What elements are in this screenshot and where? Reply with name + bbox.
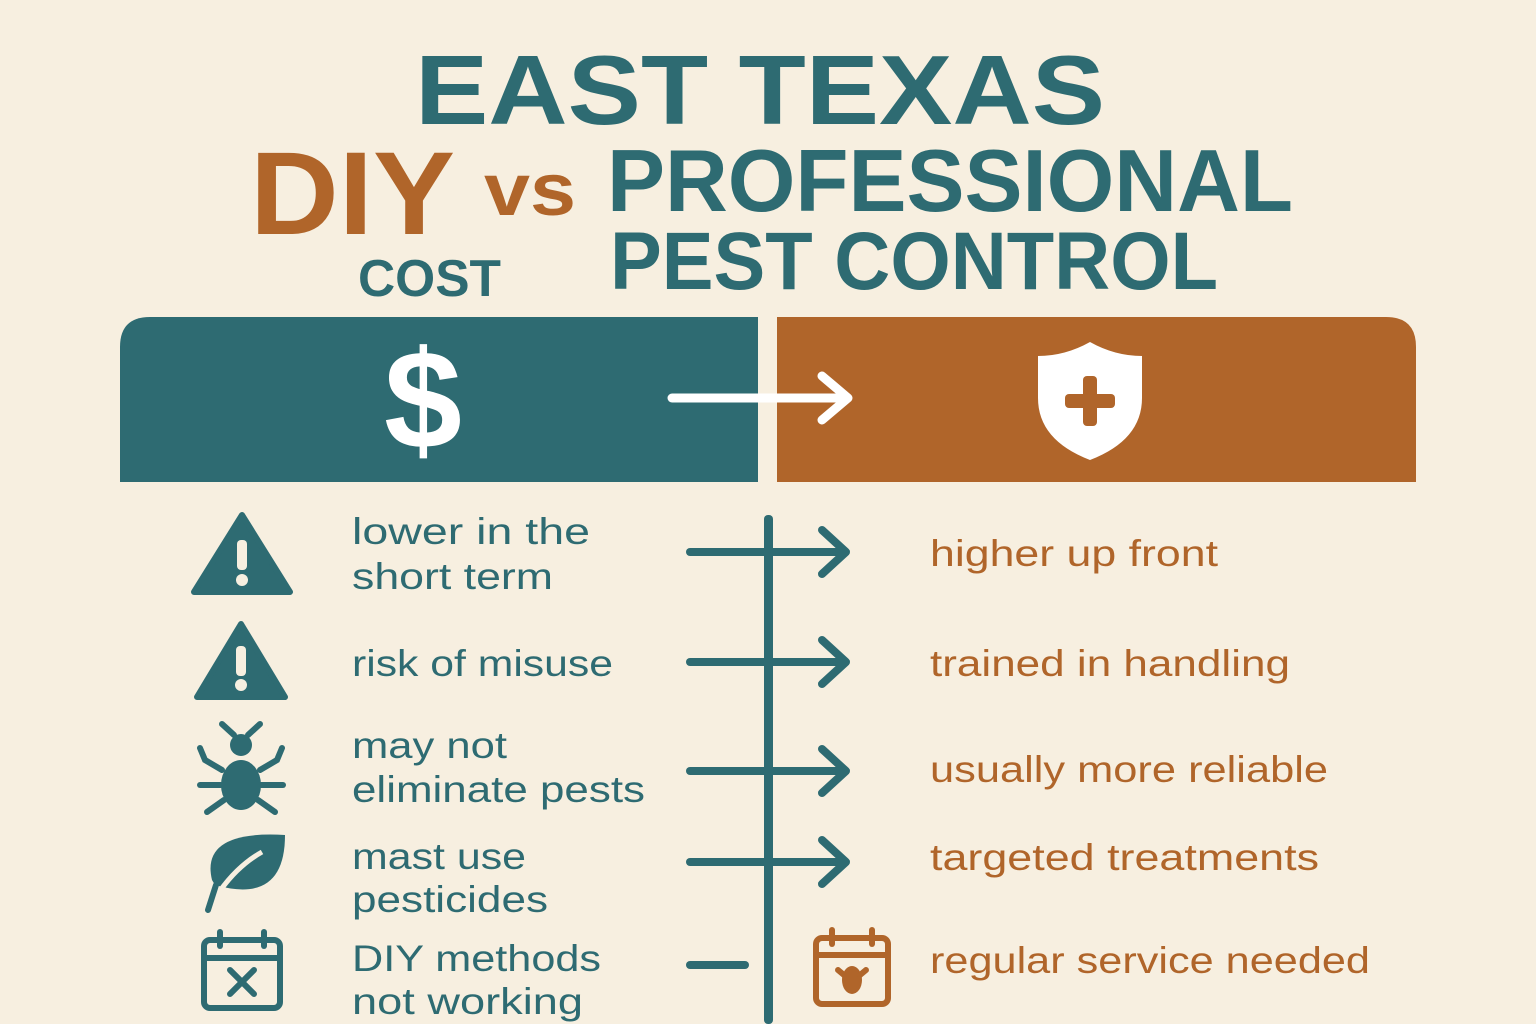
icon: calendar bug (816, 930, 888, 1004)
icon: warning 1 (194, 515, 290, 592)
left texts: DIY: risk of misuse (352, 643, 613, 684)
title: PEST CONTROL: PEST CONTROL (610, 216, 1218, 307)
icon: warning 2 (197, 624, 285, 697)
right texts: professional: targeted treatments (930, 837, 1319, 878)
title (250, 35, 1293, 308)
title: PROFESSIONAL: PROFESSIONAL (607, 131, 1293, 230)
left texts: DIY: may not (352, 725, 508, 766)
title: DIY: DIY (250, 128, 455, 260)
left texts: DIY (352, 511, 645, 1022)
icon: shield with plus (1038, 342, 1142, 460)
banner: DIY cost (120, 317, 758, 482)
icon: dollar sign: $ (384, 321, 462, 478)
left texts: DIY: eliminate pests (352, 769, 645, 810)
title: vs: vs (484, 148, 576, 231)
left texts: DIY: lower in the (352, 511, 590, 552)
right texts: professional: trained in handling (930, 643, 1290, 684)
right texts: professional: usually more reliable (930, 749, 1328, 790)
title line: EAST TEXAS: EAST TEXAS (415, 35, 1105, 145)
left texts: DIY: pesticides (352, 879, 548, 920)
left texts: DIY: DIY methods (352, 938, 601, 979)
right texts: professional: higher up front (930, 533, 1219, 574)
arrows (690, 530, 846, 965)
divider line (764, 515, 773, 1024)
arrow: banner (672, 376, 848, 420)
icon: bug (200, 724, 283, 812)
left texts: DIY: short term (352, 556, 553, 597)
icon: leaf (208, 835, 285, 910)
icon: calendar x (204, 932, 280, 1008)
left texts: DIY: mast use (352, 836, 526, 877)
left texts: DIY: not working (352, 981, 583, 1022)
right texts: professional: regular service needed (930, 940, 1370, 981)
banner: professional (777, 317, 1416, 482)
right texts: professional (930, 533, 1370, 981)
title: COST: COST (358, 250, 501, 308)
